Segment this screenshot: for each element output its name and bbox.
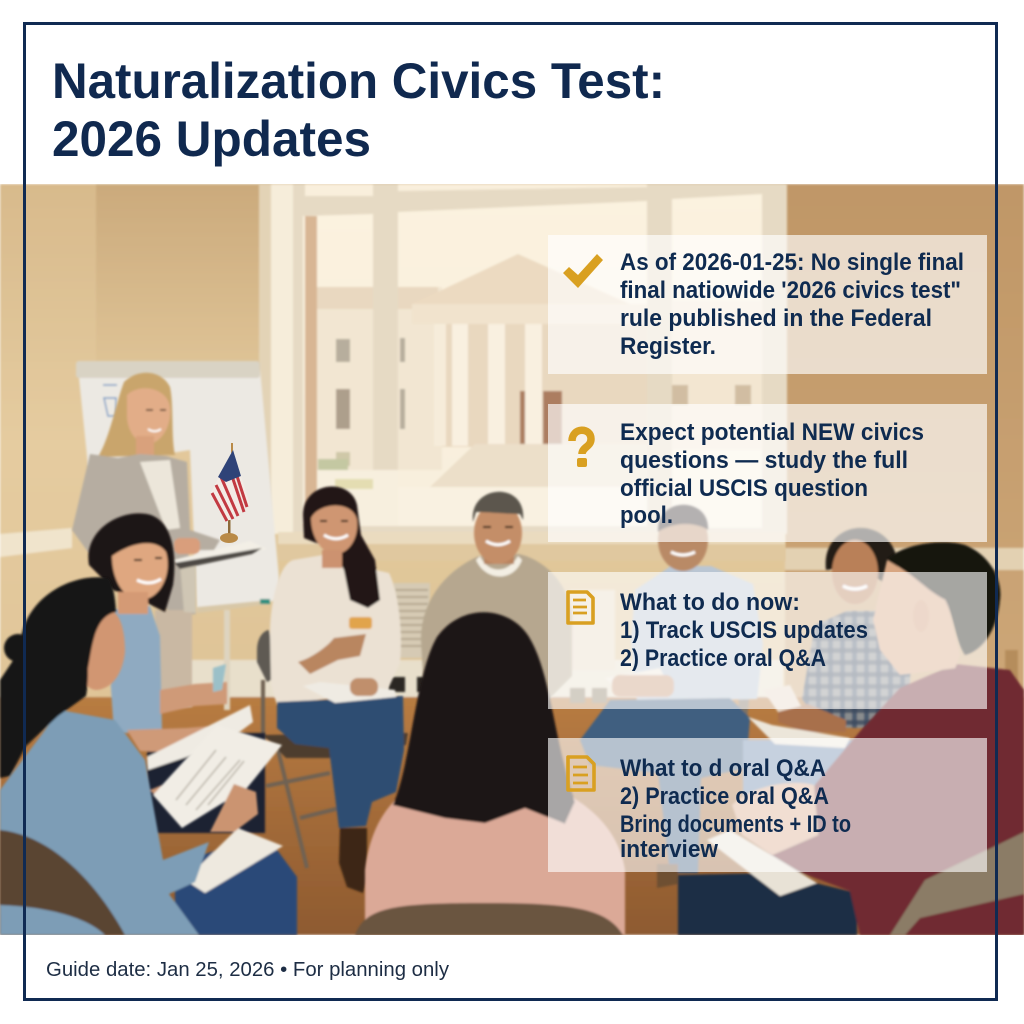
title line 1: Naturalization Civics Test: (52, 53, 665, 109)
card text: official USCIS question (620, 475, 868, 502)
card text (620, 419, 924, 529)
woman seen from behind, center foreground (355, 612, 625, 935)
radiators and vents (388, 583, 615, 703)
American flag on stand (210, 443, 250, 543)
card text: 2) Practice oral Q&A (620, 645, 826, 672)
card text (620, 589, 868, 672)
woman in plaid shirt (743, 528, 912, 800)
card text: interview (620, 836, 718, 863)
card text: questions — study the full (620, 447, 908, 474)
icon: document (568, 757, 594, 790)
card text (620, 249, 964, 360)
flipchart on easel (76, 361, 281, 710)
card text: final natiowide '2026 civics test" (620, 277, 961, 304)
seated man behind cards (580, 505, 763, 888)
card text: 1) Track USCIS updates (620, 617, 868, 644)
card text: Register. (620, 333, 716, 360)
icon: check mark (563, 254, 603, 288)
panel: what to do now (548, 572, 987, 709)
card text: Bring documents + ID to (620, 811, 851, 838)
man in center with sweater (421, 492, 572, 706)
man in burgundy shirt, foreground right (678, 542, 1024, 935)
white title band (0, 0, 1024, 184)
card text: Expect potential NEW civics (620, 419, 924, 446)
icon: document (568, 592, 593, 623)
teacher with papers (72, 373, 267, 707)
card text: rule published in the Federal (620, 305, 932, 332)
panel: status as of date (548, 235, 987, 374)
icon: question mark (572, 430, 591, 467)
card text: 2) Practice oral Q&A (620, 783, 829, 810)
woman in cream sweater with jeans (257, 486, 408, 893)
card text: What to d oral Q&A (620, 755, 826, 782)
window with courthouse view (259, 184, 787, 561)
panel: bring documents (548, 738, 987, 872)
panel: new questions (548, 404, 987, 542)
classroom photo scene (0, 184, 1024, 935)
woman with denim shirt, reading (0, 577, 297, 935)
card text: As of 2026-01-25: No single final (620, 249, 964, 276)
room walls and floor (0, 184, 1024, 935)
card text (620, 755, 851, 863)
footer note: Guide date: Jan 25, 2026 • For planning only (46, 959, 449, 981)
card text: What to do now: (620, 589, 800, 616)
card text: pool. (620, 502, 673, 529)
woman in blue shirt (88, 513, 265, 833)
title line 2: 2026 Updates (52, 111, 371, 167)
